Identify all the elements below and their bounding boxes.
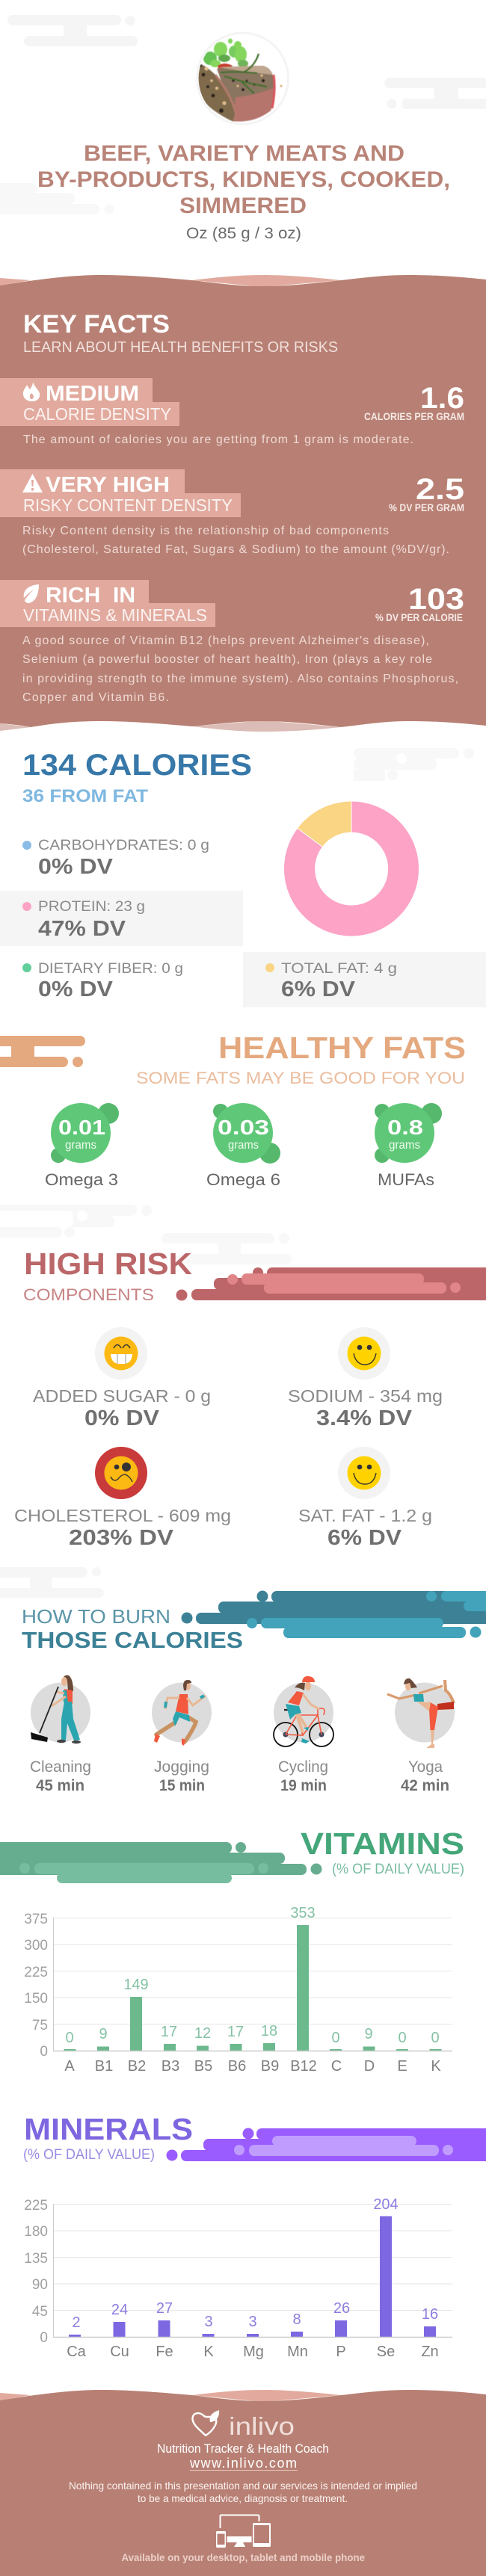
vitamins and minerals value [375,583,464,623]
activity label: cleaning [30,1758,91,1794]
bar chart: vitamins: 18 [261,2023,277,2039]
vitamins and minerals description: in providing strength to the immune system). Also contains Phosphorus, [22,673,458,685]
calorie density description: The amount of calories you are getting from 1 gram is moderate. [23,433,413,446]
bar chart: minerals: 45 [32,2304,48,2320]
bar chart: vitamins: E [397,2058,407,2075]
bar chart: minerals: 27 [156,2300,173,2317]
vitamins subheading: (% OF DAILY VALUE) [332,1862,464,1877]
omega 6 badge: Omega 6 [206,1170,280,1189]
risk item: sodium [288,1327,443,1430]
bar chart: vitamins: K [431,2058,441,2075]
bar chart: vitamins: B3 [162,2058,179,2075]
omega 6 badge: 0.03 [218,1116,269,1139]
bar chart: minerals: 0 [40,2330,48,2346]
bar chart: minerals: 3 [204,2314,213,2330]
risk item: sodium: SODIUM - 354 mg [288,1386,443,1406]
vitamins and minerals value: 103 [408,583,464,616]
risky content density value: % DV PER GRAM [389,502,464,513]
logo: inlivo: inlivo [229,2412,295,2440]
icon: warning triangle [22,474,43,492]
risk item: cholesterol: CHOLESTEROL - 609 mg [14,1506,231,1525]
healthy fats subheading: SOME FATS MAY BE GOOD FOR YOU [136,1069,465,1087]
burn heading light: HOW TO BURN [22,1605,170,1628]
bar chart: minerals: P [336,2344,346,2360]
vitamins and minerals description [22,634,458,704]
bar chart: vitamins: B1 [95,2058,113,2075]
bar chart: minerals: 2 [72,2314,81,2331]
minerals heading: MINERALS [24,2112,193,2146]
risky content density description: Risky Content density is the relationship of bad components [22,525,389,537]
MUFAs badge [375,1103,442,1189]
bar chart: minerals: Mn [287,2344,308,2360]
legend: protein [0,891,243,946]
legend: carbohydrates [22,838,209,879]
website link: www.inlivo.com [189,2456,297,2471]
bar chart: minerals: 24 [111,2302,128,2318]
bar chart: minerals [24,2196,452,2360]
risk item: sodium: 3.4% DV [316,1406,413,1430]
activity: yoga [387,1678,455,1748]
bar chart: vitamins: 0 [331,2030,340,2046]
vitamins heading: VITAMINS [301,1826,464,1861]
vitamins and minerals badge: VITAMINS & MINERALS [23,605,207,625]
MUFAs badge: 0.8 [387,1116,423,1139]
bar chart: vitamins: 353 [290,1905,316,1921]
title: BY-PRODUCTS, KIDNEYS, COOKED, [37,167,450,192]
MUFAs badge: grams [389,1139,420,1152]
background cloud: mid left [0,183,114,214]
calorie density value [364,382,464,422]
disclaimer: to be a medical advice, diagnosis or treatment. [138,2492,348,2504]
risk item: cholesterol [14,1447,231,1550]
decorative band: vitamins [0,1842,322,1883]
background cloud: above high risk left [0,1205,152,1238]
omega 3 badge: grams [65,1139,96,1152]
risky content density badge: VERY HIGH [46,473,170,497]
key facts heading: KEY FACTS [23,310,170,339]
bar chart: vitamins: B6 [228,2058,246,2075]
title: SIMMERED [179,194,307,218]
vitamins and minerals description: A good source of Vitamin B12 (helps prevent Alzheimer's disease), [22,634,429,647]
bar chart: vitamins: 225 [24,1965,48,1980]
vitamins and minerals description: Copper and Vitamin B6. [22,691,169,704]
bar chart: vitamins: 0 [431,2030,440,2046]
decorative band: minerals [166,2128,486,2161]
calorie density value: CALORIES PER GRAM [364,411,464,422]
tagline: Nutrition Tracker & Health Coach [157,2442,329,2456]
omega 6 badge: grams [228,1139,259,1152]
title: BEEF, VARIETY MEATS AND [84,141,405,166]
calorie density value: 1.6 [420,382,464,415]
icon: smiling face [338,1447,390,1499]
activity label: jogging [154,1758,209,1794]
disclaimer [69,2480,417,2504]
calorie density badge: MEDIUM [46,382,139,406]
bar chart: minerals: 180 [24,2224,48,2240]
calorie density badge: CALORIE DENSITY [23,404,171,424]
bar chart: minerals: Mg [243,2344,264,2360]
serving size: Oz (85 g / 3 oz) [186,225,301,242]
activity label: yoga: Yoga [408,1758,443,1776]
bar chart: minerals: Fe [156,2344,173,2360]
background cloud: top left [7,15,138,46]
activity label: jogging: Jogging [154,1758,209,1776]
bar chart: minerals: Ca [67,2344,87,2360]
title [37,141,450,218]
icon: worried face on red ring [95,1447,147,1499]
disclaimer: Nothing contained in this presentation and our services is intended or implied [69,2480,417,2492]
macronutrient donut chart [284,801,419,936]
risk item: added sugar: 0% DV [84,1406,160,1430]
bar chart: vitamins: 0 [398,2030,407,2046]
legend: dietary fiber: DIETARY FIBER: 0 g [38,961,183,977]
bar chart: vitamins: A [64,2058,75,2075]
bar chart: minerals: 204 [373,2196,399,2213]
risky content density badge: RISKY CONTENT DENSITY [23,495,233,515]
omega 6 badge [206,1103,280,1189]
panel: key facts [0,275,486,732]
vitamins and minerals badge [0,580,215,627]
background cloud: above high risk right [162,1233,292,1264]
bar chart: vitamins: 9 [99,2026,108,2042]
icon: flame [23,382,40,401]
healthy fats heading: HEALTHY FATS [218,1031,466,1065]
bar chart: vitamins: C [331,2058,342,2075]
activity: cleaning [31,1675,90,1743]
bar chart: minerals: 135 [24,2251,48,2267]
icon: smiling face [338,1327,390,1380]
risk item: cholesterol: 203% DV [69,1526,174,1550]
calories from fat: 36 FROM FAT [22,786,148,806]
activity: cycling [274,1676,333,1746]
key facts subheading: LEARN ABOUT HEALTH BENEFITS OR RISKS [23,339,338,356]
activity label: yoga [401,1758,449,1794]
vitamins and minerals value: % DV PER CALORIE [375,612,463,623]
bar chart: vitamins: 75 [32,2018,48,2033]
bar chart: vitamins: B5 [194,2058,212,2075]
bar chart: minerals: 8 [292,2311,301,2328]
bar chart: minerals: 90 [32,2277,48,2293]
bar chart: vitamins: 12 [194,2025,211,2042]
bar chart: vitamins: 17 [161,2024,177,2040]
bar chart: minerals: Zn [421,2344,439,2360]
bar chart: minerals: Se [377,2344,395,2360]
risk item: saturated fat: 6% DV [327,1526,402,1550]
risk item: saturated fat [298,1447,432,1550]
bar chart: vitamins [24,1905,452,2075]
icon: grinning face [95,1327,147,1380]
activity label: cycling [278,1758,328,1794]
decorative band: healthy fats [0,1036,85,1067]
bar chart: vitamins: 0 [65,2030,74,2046]
high risk heading: HIGH RISK [24,1247,192,1281]
activity label: cleaning: Cleaning [30,1758,91,1776]
risky content density badge [0,469,241,517]
background cloud: top right [384,78,486,109]
legend: dietary fiber: 0% DV [38,977,114,1001]
legend: dietary fiber [22,961,183,1001]
decorative band: burn [181,1590,486,1638]
bar chart: minerals: 3 [248,2314,257,2330]
risk item: saturated fat: SAT. FAT - 1.2 g [298,1506,432,1525]
activity label: yoga: 42 min [401,1777,449,1794]
bar chart: minerals: K [203,2344,214,2360]
risk item: added sugar: ADDED SUGAR - 0 g [33,1386,211,1406]
bar chart: vitamins: 375 [24,1912,48,1927]
bar chart: vitamins: 17 [227,2024,244,2040]
risky content density value: 2.5 [416,473,464,506]
activity: jogging [152,1680,212,1746]
bar chart: vitamins: 149 [123,1977,149,1993]
logo: inlivo [192,2410,295,2440]
bar chart: vitamins: D [364,2058,375,2075]
icon: devices [216,2515,271,2548]
decorative band: high risk [176,1267,486,1300]
activity label: jogging: 15 min [159,1777,205,1794]
omega 3 badge: 0.01 [58,1116,105,1139]
bar chart: vitamins: 9 [364,2026,373,2042]
vitamins and minerals badge: RICH IN [46,584,135,608]
background cloud: calories [354,748,474,781]
icon: leaf [24,584,39,603]
calorie density badge [0,378,179,426]
legend: total fat: 6% DV [281,977,356,1001]
risk item: added sugar [33,1327,211,1430]
vitamins and minerals description: Selenium (a powerful booster of heart health), Iron (plays a key role [22,653,432,666]
bar chart: vitamins: 300 [24,1938,48,1953]
bar chart: vitamins: 0 [40,2044,48,2060]
background cloud: above burn section [0,1567,104,1598]
risky content density description [22,525,449,556]
panel: footer [0,2390,486,2576]
legend: carbohydrates: 0% DV [38,855,114,879]
bar chart: vitamins: B9 [261,2058,279,2075]
bar chart: vitamins: B2 [128,2058,146,2075]
availability note: Available on your desktop, tablet and mobile phone [121,2551,365,2563]
activity label: cycling: 19 min [280,1777,327,1794]
omega 3 badge: Omega 3 [45,1170,118,1189]
risky content density description: (Cholesterol, Saturated Fat, Sugars & Sodium) to the amount (%DV/gr). [22,543,449,556]
legend: total fat: TOTAL FAT: 4 g [281,961,397,977]
food photo: steak [197,33,289,124]
calories heading: 134 CALORIES [22,749,252,782]
bar chart: minerals: 26 [333,2300,350,2317]
high risk subheading: COMPONENTS [23,1285,154,1304]
legend: protein: 47% DV [38,917,126,941]
bar chart: vitamins: 150 [24,1991,48,2007]
risky content density value [389,473,464,513]
legend: protein: PROTEIN: 23 g [38,899,145,915]
bar chart: minerals: 16 [422,2306,438,2323]
legend: total fat [243,952,486,1007]
burn heading bold: THOSE CALORIES [22,1627,243,1653]
minerals subheading: (% OF DAILY VALUE) [23,2147,155,2163]
legend: carbohydrates: CARBOHYDRATES: 0 g [38,838,209,853]
bar chart: vitamins: B12 [290,2058,317,2075]
activity label: cleaning: 45 min [36,1777,84,1794]
activity label: cycling: Cycling [278,1758,328,1776]
bar chart: minerals: Cu [110,2344,129,2360]
bar chart: minerals: 225 [24,2198,48,2214]
omega 3 badge [45,1103,119,1189]
MUFAs badge: MUFAs [378,1170,434,1189]
